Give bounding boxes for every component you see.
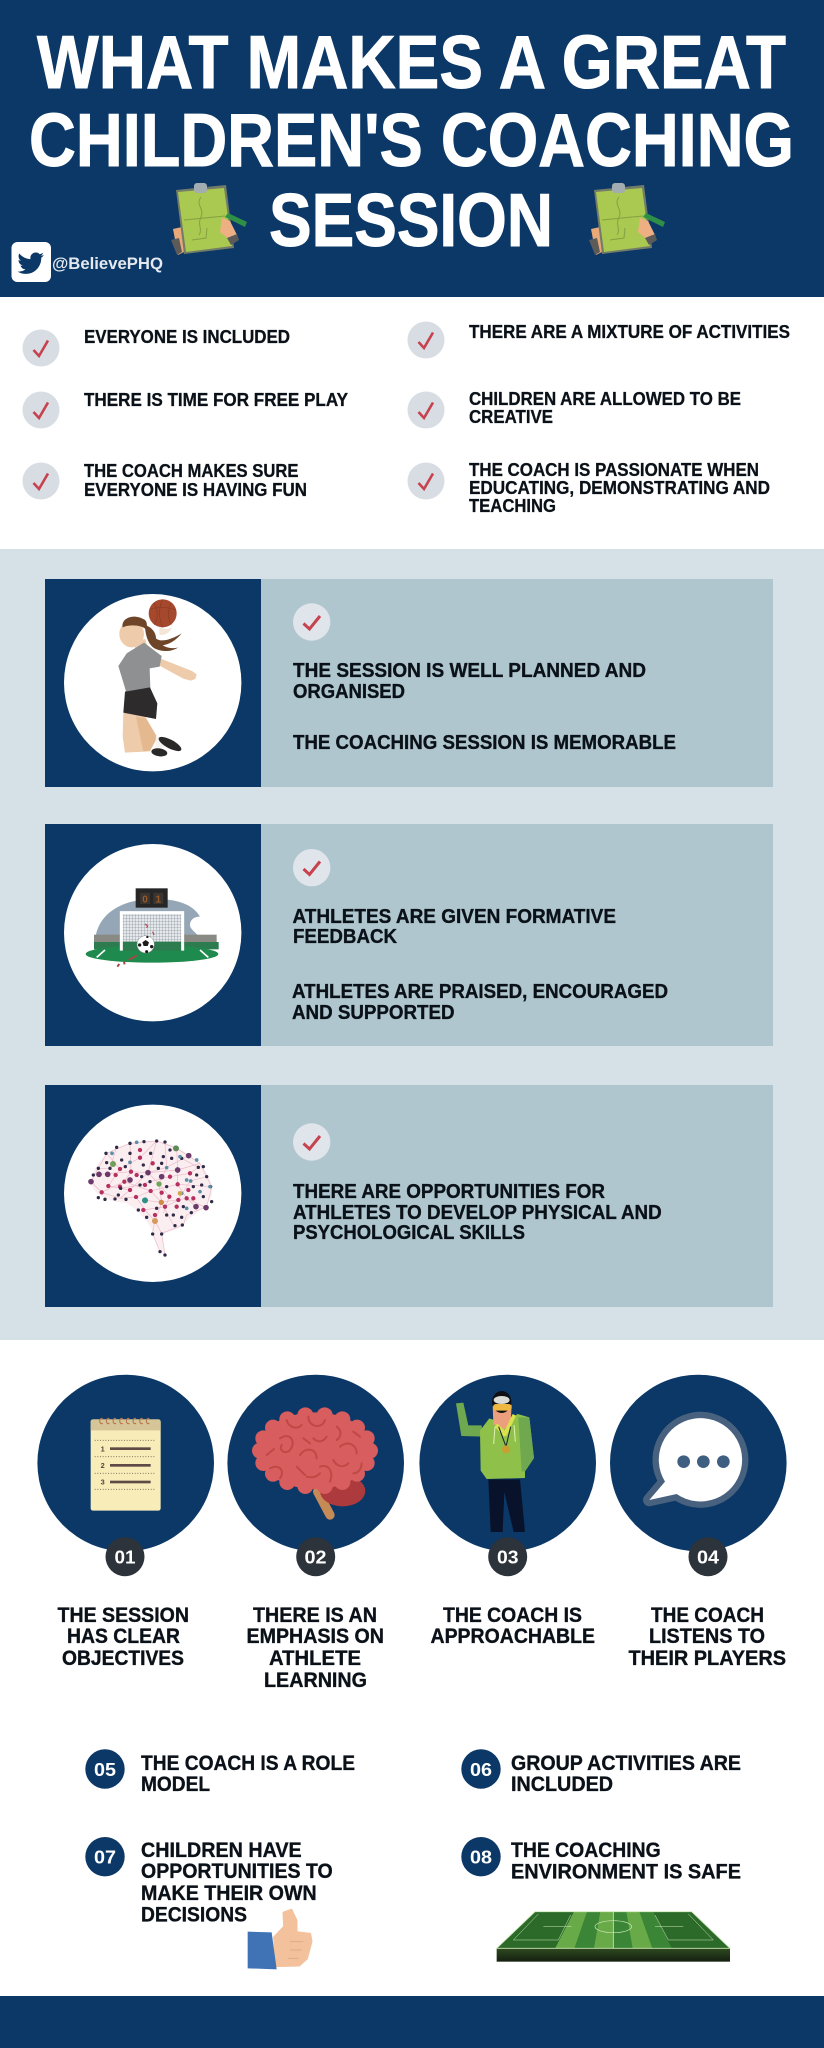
number badge: 02: [304, 1546, 326, 1568]
label: HAS CLEAR: [67, 1625, 180, 1648]
check item: fun: EVERYONE IS HAVING FUN: [84, 479, 307, 500]
icon: notepad: 2: [101, 1461, 105, 1470]
number badge: [106, 1537, 144, 1576]
item 07: own decisions: [85, 1837, 333, 1927]
icon: notepad: 3: [101, 1478, 105, 1487]
label: LEARNING: [264, 1669, 367, 1692]
check item: everyone included: EVERYONE IS INCLUDED: [84, 326, 290, 347]
check item: mixture: [408, 321, 790, 358]
icon: football pitch: [497, 1912, 730, 1962]
card text: [293, 660, 676, 754]
number badge: 04: [697, 1546, 720, 1568]
label: THEIR PLAYERS: [628, 1647, 786, 1670]
item 05: role model: [85, 1749, 355, 1796]
panel: checklist: [0, 297, 824, 549]
check item: everyone included: [22, 326, 290, 366]
item 07: own decisions: 07: [94, 1847, 116, 1868]
number badge: [296, 1537, 335, 1576]
item 07: own decisions: OPPORTUNITIES TO: [141, 1860, 333, 1883]
check badge: [293, 849, 330, 886]
check item: fun: THE COACH MAKES SURE: [84, 460, 298, 481]
number badge: 01: [114, 1546, 136, 1568]
footer band: [0, 1996, 824, 2048]
icon: tactics clipboard left: [171, 183, 247, 255]
item 06: group activities: INCLUDED: [511, 1773, 613, 1796]
panel: skills card: [45, 1085, 773, 1307]
check item: passionate: [408, 459, 770, 516]
icon: brain: [252, 1407, 378, 1515]
card text: THERE ARE OPPORTUNITIES FOR: [293, 1181, 605, 1203]
label: THE COACH: [651, 1604, 764, 1627]
icon: twitter: [12, 242, 51, 282]
check item: free play: THERE IS TIME FOR FREE PLAY: [84, 389, 348, 410]
icon: football goal with scoreboard: 1: [156, 894, 162, 905]
icon: coach figure: [456, 1391, 534, 1532]
check badge: [293, 1123, 330, 1161]
item 08: safe environment: 08: [470, 1847, 492, 1868]
card text: ORGANISED: [293, 681, 405, 703]
item 06: group activities: [461, 1749, 741, 1796]
card text: ATHLETES ARE GIVEN FORMATIVE: [292, 906, 616, 928]
icon: notepad: 1: [101, 1444, 105, 1453]
item 06: group activities: GROUP ACTIVITIES ARE: [511, 1752, 741, 1775]
icon: girl heading ball: [118, 599, 197, 757]
label: EMPHASIS ON: [246, 1625, 384, 1648]
check item: passionate: EDUCATING, DEMONSTRATING AND: [469, 477, 770, 498]
section background: feature cards: [0, 549, 824, 1340]
card text: FEEDBACK: [293, 926, 397, 948]
card text: THE COACHING SESSION IS MEMORABLE: [293, 732, 676, 754]
label: ATHLETE: [269, 1647, 361, 1670]
check item: free play: [22, 389, 348, 428]
label: THERE IS AN: [253, 1604, 377, 1627]
item 08: safe environment: [461, 1837, 741, 1884]
item 01: clear objectives: [37, 1375, 214, 1670]
label: [628, 1604, 786, 1670]
label: THE SESSION: [58, 1604, 189, 1627]
icon: notepad: [91, 1418, 161, 1511]
label: [246, 1604, 384, 1692]
icon: network brain: [91, 1141, 212, 1255]
label: OBJECTIVES: [62, 1647, 184, 1670]
item 06: group activities: 06: [470, 1759, 492, 1780]
card text: AND SUPPORTED: [292, 1002, 454, 1024]
icon: tactics clipboard right: [589, 183, 665, 255]
item 05: role model: MODEL: [141, 1773, 210, 1796]
card text: ATHLETES ARE PRAISED, ENCOURAGED: [292, 981, 668, 1003]
item 08: safe environment: ENVIRONMENT IS SAFE: [511, 1860, 741, 1884]
icon: football goal with scoreboard: 0: [142, 894, 148, 905]
icon: speech bubble: [649, 1418, 742, 1501]
item 07: own decisions: MAKE THEIR OWN: [141, 1882, 317, 1905]
card text: [292, 906, 668, 1024]
check item: passionate: TEACHING: [469, 495, 556, 516]
label: APPROACHABLE: [430, 1625, 595, 1648]
label: [58, 1604, 189, 1670]
twitter handle: @BelievePHQ: [52, 254, 163, 273]
header band: [0, 0, 824, 297]
number badge: [488, 1537, 527, 1576]
card text: THE SESSION IS WELL PLANNED AND: [293, 660, 646, 682]
card text: ATHLETES TO DEVELOP PHYSICAL AND: [293, 1202, 662, 1224]
check badge: [293, 603, 330, 641]
check item: creative: [408, 388, 741, 428]
label: [430, 1604, 595, 1648]
item 02: athlete learning: [227, 1375, 404, 1692]
check item: creative: CREATIVE: [469, 406, 553, 427]
item 04: listens to players: [610, 1375, 787, 1670]
label: LISTENS TO: [649, 1625, 765, 1648]
panel: session planning card: [45, 579, 773, 787]
check item: mixture: THERE ARE A MIXTURE OF ACTIVITIES: [469, 321, 790, 342]
title: [29, 20, 794, 262]
check item: fun: [22, 460, 307, 500]
check item: creative: CHILDREN ARE ALLOWED TO BE: [469, 388, 741, 409]
card text: [293, 1181, 662, 1244]
label: THE COACH IS: [443, 1604, 582, 1627]
icon: football goal with scoreboard: [86, 888, 219, 967]
icon: thumbs up: [248, 1910, 311, 1969]
item 05: role model: THE COACH IS A ROLE: [141, 1752, 355, 1775]
item 07: own decisions: CHILDREN HAVE: [141, 1839, 302, 1862]
panel: feedback card: [45, 824, 773, 1046]
card text: PSYCHOLOGICAL SKILLS: [293, 1222, 525, 1244]
item 03: approachable coach: [419, 1375, 596, 1648]
number badge: 03: [497, 1546, 518, 1568]
item 05: role model: 05: [94, 1759, 116, 1780]
item 07: own decisions: DECISIONS: [141, 1904, 247, 1927]
title: SESSION: [269, 178, 553, 262]
check item: passionate: THE COACH IS PASSIONATE WHEN: [469, 459, 759, 480]
item 08: safe environment: THE COACHING: [511, 1839, 661, 1862]
number badge: [688, 1537, 728, 1576]
